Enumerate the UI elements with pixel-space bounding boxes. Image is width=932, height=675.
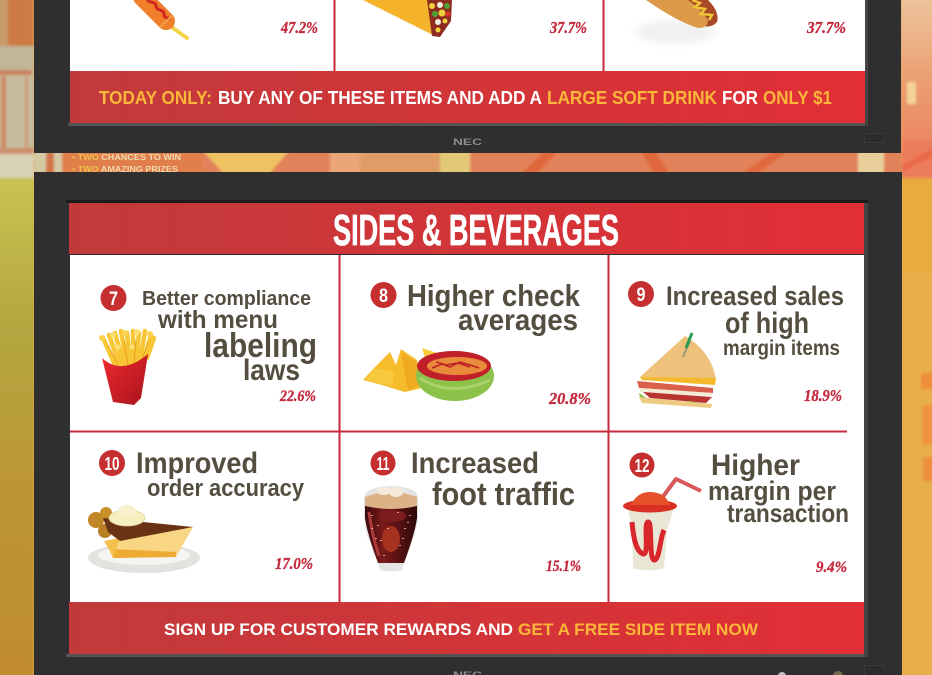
icon: taco: [363, 0, 452, 37]
icon: nachos and salsa: [363, 348, 494, 401]
top monitor: [34, 0, 901, 153]
panel: item 9: [628, 281, 844, 408]
panel: item 10: order accuracy: [147, 475, 305, 502]
menu grid: [70, 255, 864, 604]
offer banner: [70, 71, 865, 123]
header: sides and beverages: [69, 203, 864, 255]
panel: item 8: 8: [379, 286, 388, 307]
panel: item 7: labeling: [204, 327, 317, 365]
rewards banner: GET A FREE SIDE ITEM NOW: [518, 620, 759, 639]
icon: slush cup: [623, 479, 701, 570]
panel: item 10: [88, 447, 313, 573]
panel: item 12: 9.4%: [816, 559, 847, 576]
screen white area: [70, 0, 865, 71]
panel: item 12: [623, 449, 849, 576]
icon: hot dog: [635, 0, 718, 44]
panel: item 9: margin items: [723, 337, 840, 360]
panel: item 7: with menu: [157, 306, 278, 334]
panel: item 11: 11: [376, 454, 390, 474]
bottom monitor: [34, 172, 902, 675]
rewards banner: [69, 602, 864, 654]
poster text line two: • TWO AMAZING PRIZES: [72, 165, 179, 174]
panel: item 12: transaction: [727, 498, 849, 528]
offer banner: ONLY $1: [763, 88, 832, 108]
offer banner: FOR: [722, 88, 758, 108]
panel: item 9: 9: [636, 285, 646, 306]
poster text line one: • TWO CHANCES TO WIN: [72, 153, 181, 162]
panel: item 10: Improved: [136, 447, 258, 480]
icon: corn dog: [142, 0, 187, 38]
icon: pie slice: [88, 505, 200, 573]
panel: item 9: Increased sales: [666, 281, 844, 311]
panel: item 8: 20.8%: [548, 389, 591, 408]
panel: item 9: 18.9%: [804, 386, 842, 405]
panel: item 12: 12: [634, 456, 650, 476]
monitor logo: NEC: [453, 137, 482, 148]
panel: item 11: [364, 447, 581, 575]
panel: item 8: averages: [458, 304, 578, 337]
panel: item 10: 10: [104, 454, 120, 474]
panel: item 7: [99, 285, 317, 405]
panel: item 11: foot traffic: [432, 476, 575, 512]
icon: soda glass: [364, 486, 418, 572]
panel: item 9: of high: [725, 307, 809, 340]
panel: item 8: Higher check: [407, 278, 581, 313]
panel: item 11: 15.1%: [546, 558, 581, 575]
header: sides and beverages: SIDES & BEVERAGES: [333, 206, 619, 255]
rewards banner: SIGN UP FOR CUSTOMER REWARDS AND: [164, 620, 513, 639]
panel: item 7: 22.6%: [279, 388, 316, 405]
strip of background poster between monitors: [34, 150, 902, 175]
panel: item 7: Better compliance: [142, 287, 311, 310]
offer banner: TODAY ONLY:: [99, 88, 212, 108]
icon: french fries: [99, 329, 154, 405]
panel: item 7: 7: [109, 289, 118, 310]
offer banner: LARGE SOFT DRINK: [547, 88, 717, 108]
panel: item 12: Higher: [711, 449, 800, 482]
37.7 percent right: 37.7%: [806, 18, 846, 37]
47.2 percent: 47.2%: [280, 18, 318, 37]
panel: item 11: Increased: [411, 447, 539, 480]
panel: item 7: laws: [243, 354, 300, 387]
panel: item 10: 17.0%: [275, 554, 313, 573]
panel: item 8: [363, 278, 591, 408]
icon: sandwich: [637, 333, 716, 408]
37.7 percent middle: 37.7%: [549, 18, 587, 37]
panel: item 12: margin per: [708, 476, 836, 506]
offer banner: BUY ANY OF THESE ITEMS AND ADD A: [218, 88, 542, 108]
